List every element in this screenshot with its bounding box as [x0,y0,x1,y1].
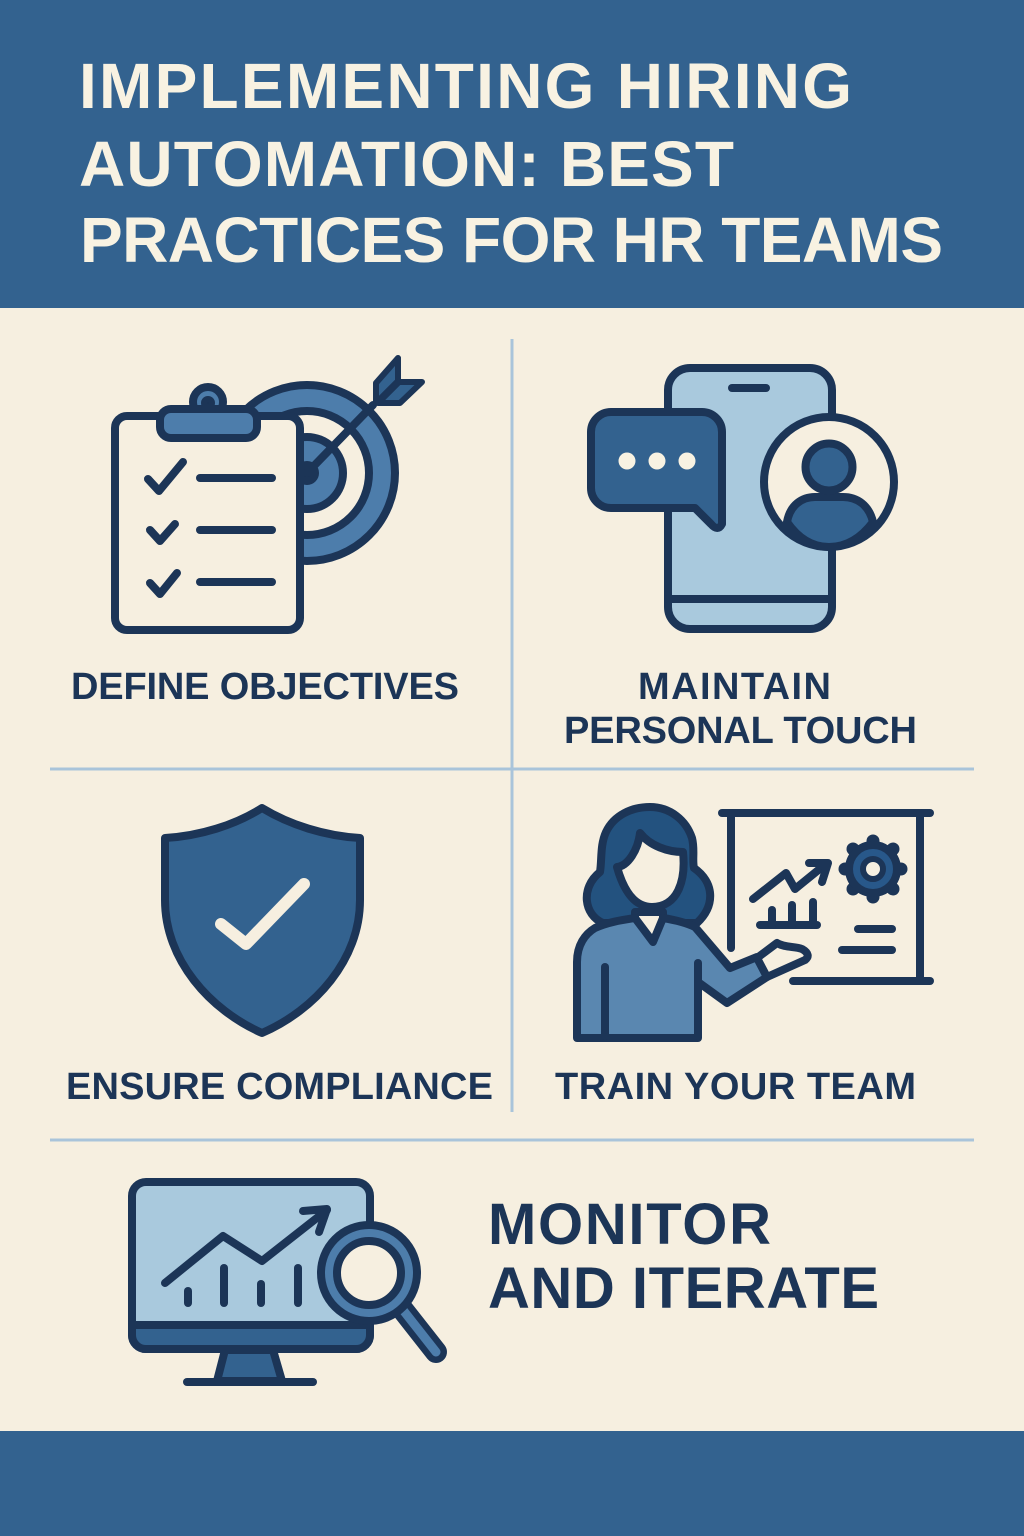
title: PRACTICES FOR HR TEAMS [80,204,943,276]
title: IMPLEMENTING HIRING [79,50,852,122]
header band [0,0,1024,308]
icon: clipboard and target [115,358,422,630]
label: maintain personal touch [564,666,917,752]
label: monitor and iterate: MONITOR [488,1192,771,1257]
label: ensure compliance: ENSURE COMPLIANCE [66,1066,493,1108]
label: train your team: TRAIN YOUR TEAM [555,1066,916,1108]
label: monitor and iterate [488,1192,879,1321]
icon: phone with chat bubble and profile [591,368,894,629]
title: AUTOMATION: BEST [79,128,734,200]
panel: maintain personal touch [564,368,917,752]
panel: monitor and iterate [132,1182,879,1382]
label: define objectives: DEFINE OBJECTIVES [71,666,459,708]
panel: train your team [555,807,930,1108]
icon: monitor with magnifying glass [132,1182,436,1382]
label: monitor and iterate: AND ITERATE [488,1256,879,1321]
label: maintain personal touch: MAINTAIN [638,666,831,708]
label: maintain personal touch: PERSONAL TOUCH [564,710,917,752]
title [79,50,943,276]
footer band [0,1431,1024,1536]
icon: shield with check [165,808,360,1033]
panel: define objectives [71,358,459,708]
icon: presenter and board [577,807,930,1038]
panel: ensure compliance [66,808,493,1108]
